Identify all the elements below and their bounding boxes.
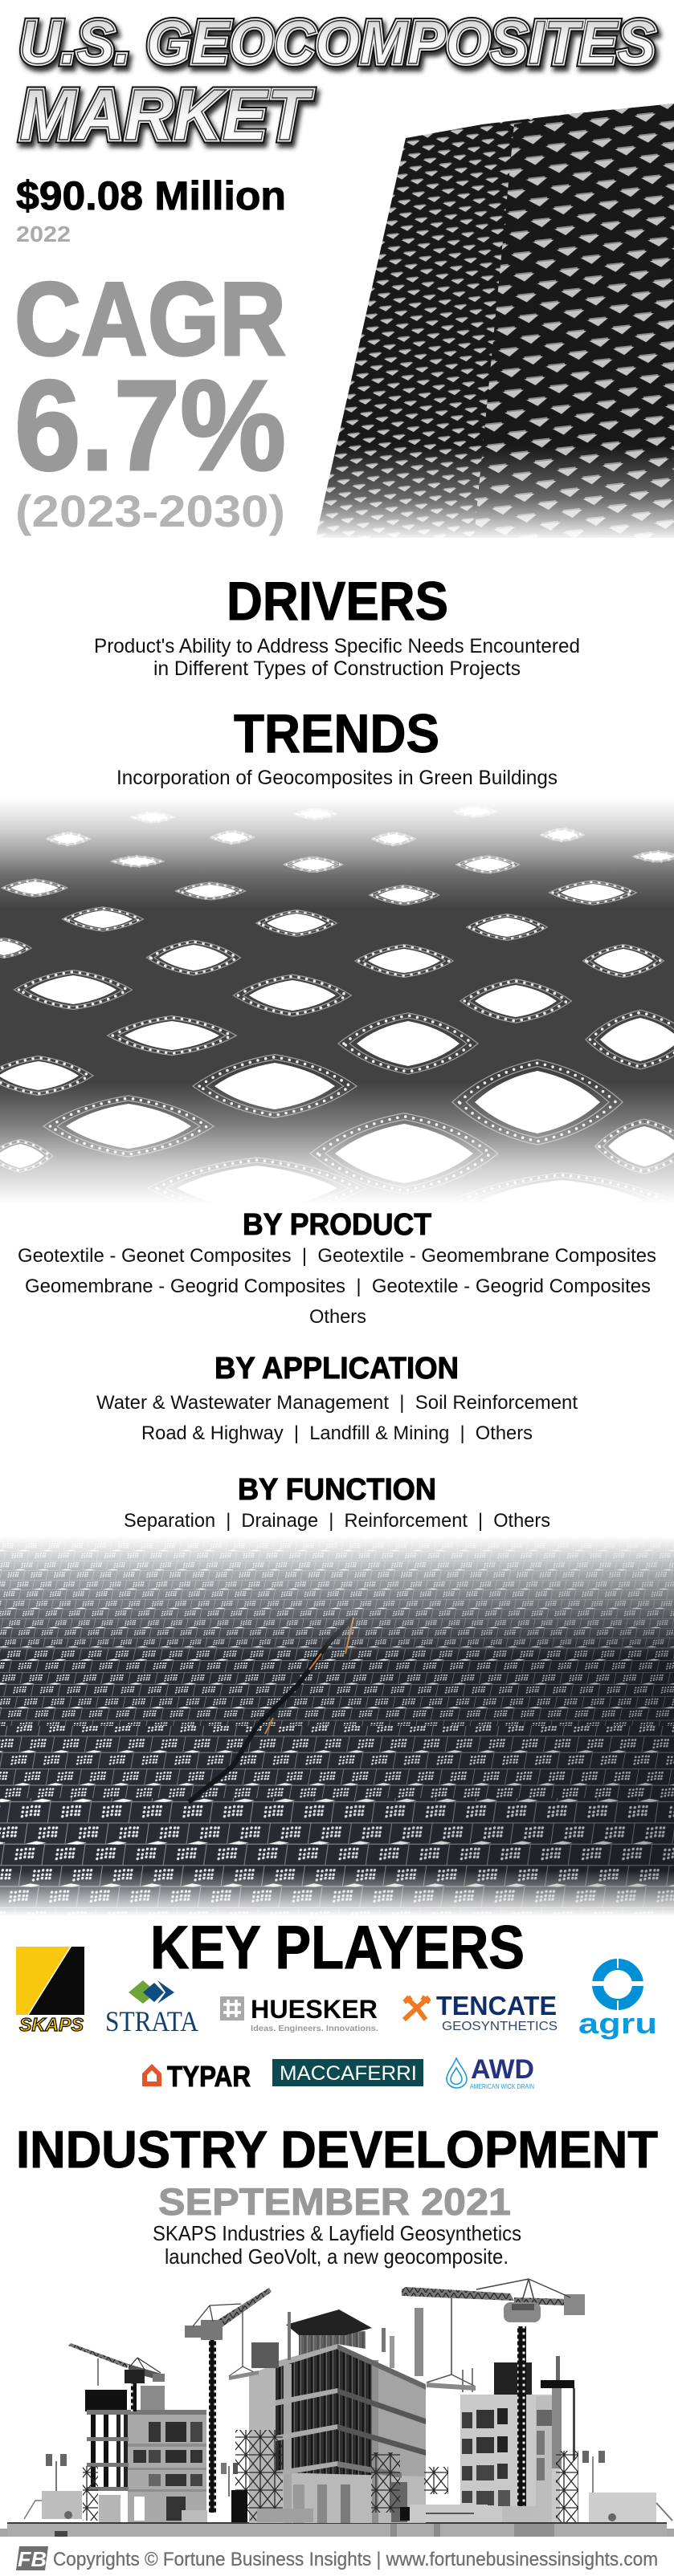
drivers text: in Different Types of Construction Projects bbox=[153, 657, 521, 680]
by product list: Others bbox=[309, 1306, 366, 1328]
logo: SKAPS bbox=[16, 1947, 84, 2035]
logo: Maccaferri: MACCAFERRI bbox=[280, 2062, 417, 2085]
trends section bbox=[116, 703, 558, 789]
CAGR label: CAGR bbox=[14, 260, 286, 377]
ground slab bbox=[0, 2522, 674, 2537]
title: MARKET bbox=[19, 75, 314, 156]
key players logos bbox=[16, 1947, 657, 2093]
segmentation: by application bbox=[96, 1352, 578, 1444]
title bbox=[19, 9, 658, 160]
logo: Typar: TYPAR bbox=[167, 2060, 251, 2093]
drivers section bbox=[94, 571, 580, 680]
by function list: Separation | Drainage | Reinforcement | Others bbox=[124, 1510, 550, 1532]
segmentation: by function bbox=[124, 1473, 550, 1532]
by product list: Geotextile - Geonet Composites | Geotextile - Geomembrane Composites bbox=[18, 1245, 656, 1267]
development text: SKAPS Industries & Layfield Geosynthetics bbox=[153, 2221, 521, 2245]
logo: TenCate Geosynthetics: TENCATE bbox=[436, 1991, 557, 2021]
by function heading: BY FUNCTION bbox=[238, 1473, 436, 1507]
by product list bbox=[18, 1245, 656, 1328]
trends heading: TRENDS bbox=[234, 703, 439, 764]
title: MARKET bbox=[22, 79, 317, 160]
development text bbox=[153, 2221, 521, 2269]
illustration: construction site bbox=[0, 2279, 674, 2537]
drivers heading: DRIVERS bbox=[227, 571, 448, 632]
scaffolding and site clutter bbox=[182, 2430, 538, 2522]
logo: Huesker: Ideas. Engineers. Innovations. bbox=[251, 2025, 378, 2033]
light towers and generators bbox=[24, 2451, 672, 2522]
development date: SEPTEMBER 2021 bbox=[158, 2180, 511, 2223]
image: black geonet mesh bbox=[309, 104, 674, 542]
by application list bbox=[96, 1392, 578, 1444]
drivers text: Product's Ability to Address Specific Needs Encountered bbox=[94, 635, 580, 657]
logo: SKAPS: SKAPS bbox=[19, 2014, 84, 2035]
CAGR value: 6.7% bbox=[14, 353, 286, 497]
by application list: Road & Highway | Landfill & Mining | Others bbox=[141, 1422, 533, 1444]
industry development section bbox=[16, 2120, 658, 2269]
logo: Typar bbox=[142, 2060, 251, 2093]
crane: center bbox=[185, 2288, 272, 2513]
trends text: Incorporation of Geocomposites in Green Buildings bbox=[116, 767, 558, 789]
by application list: Water & Wastewater Management | Soil Reinforcement bbox=[96, 1392, 578, 1414]
logo: TenCate Geosynthetics bbox=[404, 1991, 558, 2033]
image: perforated geocell grid bbox=[0, 799, 674, 1227]
logo: agru bbox=[578, 1957, 657, 2040]
title: MARKET bbox=[19, 75, 314, 156]
drivers text bbox=[94, 635, 580, 680]
by product heading: BY PRODUCT bbox=[243, 1208, 431, 1242]
image: black honeycomb geocell field bbox=[0, 1536, 674, 1916]
footer copyright bbox=[16, 2546, 658, 2571]
icon: Fortune Business Insights logo: FB bbox=[18, 2547, 47, 2571]
industry development heading: INDUSTRY DEVELOPMENT bbox=[16, 2120, 658, 2179]
center building bbox=[249, 2308, 426, 2523]
logo: American Wick Drain bbox=[447, 2054, 534, 2090]
development text: launched GeoVolt, a new geocomposite. bbox=[165, 2244, 509, 2269]
by product list: Geomembrane - Geogrid Composites | Geotextile - Geogrid Composites bbox=[25, 1276, 651, 1297]
left building bbox=[83, 2386, 206, 2522]
segmentation: by product bbox=[18, 1208, 656, 1328]
logo: American Wick Drain: AWD bbox=[471, 2054, 534, 2085]
logo: TenCate Geosynthetics: GEOSYNTHETICS bbox=[442, 2020, 558, 2033]
market value: $90.08 Million bbox=[16, 173, 286, 218]
crane: right bbox=[402, 2279, 585, 2513]
logo: Huesker bbox=[220, 1995, 378, 2033]
right building bbox=[460, 2356, 578, 2522]
logo: agru: agru bbox=[578, 2007, 657, 2040]
logo: Huesker: HUESKER bbox=[251, 1995, 378, 2024]
title: MARKET bbox=[19, 75, 314, 156]
logo: Strata: STRATA bbox=[105, 2005, 198, 2037]
logo: American Wick Drain: AMERICAN WICK DRAIN bbox=[470, 2083, 534, 2090]
crane: left bbox=[68, 2343, 165, 2411]
base year: 2022 bbox=[16, 222, 71, 246]
forecast period: (2023-2030) bbox=[15, 486, 285, 536]
by application heading: BY APPLICATION bbox=[214, 1352, 459, 1386]
logo: Strata bbox=[105, 1980, 198, 2037]
key players heading: KEY PLAYERS bbox=[150, 1914, 525, 1982]
